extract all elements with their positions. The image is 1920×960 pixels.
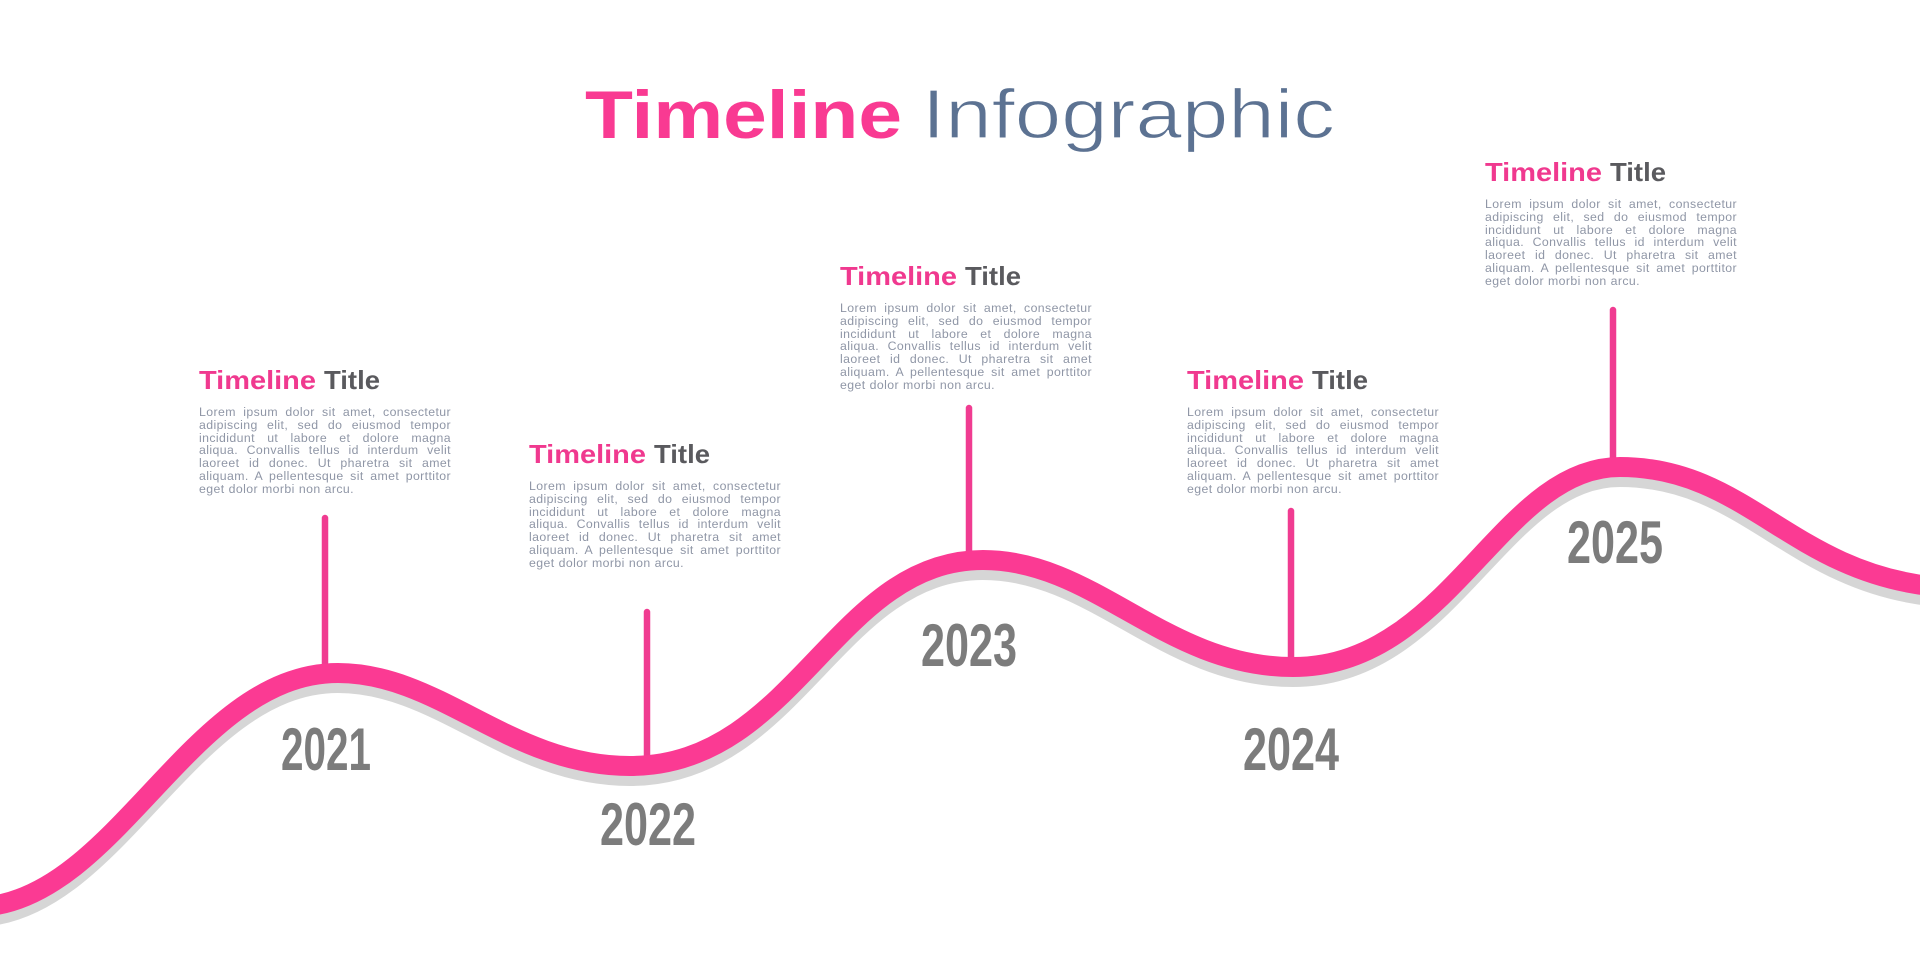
- panel: 2023: [840, 261, 1092, 392]
- panel text: incididunt ut labore et dolore magna: [840, 327, 1092, 341]
- panel text: laoreet id donec. Ut pharetra sit amet: [1485, 248, 1737, 262]
- panel text: [1485, 197, 1737, 288]
- panel text: eget dolor morbi non arcu.: [840, 378, 995, 392]
- panel heading: Timeline: [840, 261, 957, 291]
- panel heading: Timeline: [1485, 157, 1602, 187]
- panel text: laoreet id donec. Ut pharetra sit amet: [529, 530, 781, 544]
- panel text: aliquam. A pellentesque sit amet porttitor: [840, 365, 1092, 379]
- panel heading: Title: [1312, 365, 1368, 395]
- panel heading: Title: [324, 365, 380, 395]
- year 2022: 2022: [600, 791, 696, 858]
- title: [585, 75, 1335, 153]
- title: Infographic: [922, 75, 1335, 153]
- panel text: aliquam. A pellentesque sit amet porttitor: [199, 469, 451, 483]
- panel text: [529, 479, 781, 570]
- panel text: eget dolor morbi non arcu.: [1485, 274, 1640, 288]
- year 2024: 2024: [1243, 716, 1339, 783]
- panel: 2022: [529, 439, 781, 570]
- panel heading: Timeline: [529, 439, 646, 469]
- panel text: Lorem ipsum dolor sit amet, consectetur: [840, 301, 1092, 315]
- panel text: eget dolor morbi non arcu.: [1187, 482, 1342, 496]
- panel text: aliqua. Convallis tellus id interdum velit: [529, 517, 781, 531]
- stem 2025: [1610, 310, 1616, 462]
- panel text: Lorem ipsum dolor sit amet, consectetur: [199, 405, 451, 419]
- panel text: adipiscing elit, sed do eiusmod tempor: [199, 418, 451, 432]
- panel heading: [1485, 157, 1666, 187]
- panel text: Lorem ipsum dolor sit amet, consectetur: [529, 479, 781, 493]
- panel: 2021: [199, 365, 451, 496]
- panel text: laoreet id donec. Ut pharetra sit amet: [199, 456, 451, 470]
- panel text: incididunt ut labore et dolore magna: [1485, 223, 1737, 237]
- panel text: eget dolor morbi non arcu.: [529, 556, 684, 570]
- panel text: laoreet id donec. Ut pharetra sit amet: [840, 352, 1092, 366]
- curve line: [0, 467, 1920, 906]
- panel heading: [840, 261, 1021, 291]
- panel heading: [199, 365, 380, 395]
- panel text: [1187, 405, 1439, 496]
- panel heading: Title: [965, 261, 1021, 291]
- panel text: Lorem ipsum dolor sit amet, consectetur: [1187, 405, 1439, 419]
- panel text: aliquam. A pellentesque sit amet porttitor: [1485, 261, 1737, 275]
- panel text: adipiscing elit, sed do eiusmod tempor: [1187, 418, 1439, 432]
- panel text: incididunt ut labore et dolore magna: [199, 431, 451, 445]
- panel text: aliquam. A pellentesque sit amet porttitor: [1187, 469, 1439, 483]
- title: Timeline: [585, 77, 902, 153]
- panel: 2024: [1187, 365, 1439, 496]
- panel text: adipiscing elit, sed do eiusmod tempor: [529, 492, 781, 506]
- panel text: aliquam. A pellentesque sit amet porttitor: [529, 543, 781, 557]
- panel text: aliqua. Convallis tellus id interdum velit: [840, 339, 1092, 353]
- panel text: adipiscing elit, sed do eiusmod tempor: [1485, 210, 1737, 224]
- panel text: [199, 405, 451, 496]
- panel text: aliqua. Convallis tellus id interdum velit: [199, 443, 451, 457]
- panel heading: [529, 439, 710, 469]
- panel heading: [1187, 365, 1368, 395]
- panel heading: Timeline: [199, 365, 316, 395]
- year 2021: 2021: [281, 716, 371, 783]
- panel: 2025: [1485, 157, 1737, 288]
- stem 2022: [644, 612, 650, 762]
- panel text: aliqua. Convallis tellus id interdum velit: [1187, 443, 1439, 457]
- panel text: aliqua. Convallis tellus id interdum velit: [1485, 235, 1737, 249]
- panel text: Lorem ipsum dolor sit amet, consectetur: [1485, 197, 1737, 211]
- stem 2023: [966, 408, 972, 556]
- panel text: incididunt ut labore et dolore magna: [1187, 431, 1439, 445]
- panel text: laoreet id donec. Ut pharetra sit amet: [1187, 456, 1439, 470]
- stem 2024: [1288, 511, 1294, 662]
- panel heading: Title: [654, 439, 710, 469]
- curve shadow: [0, 477, 1920, 916]
- stem 2021: [322, 518, 328, 670]
- year 2025: 2025: [1567, 509, 1663, 576]
- panel heading: Title: [1610, 157, 1666, 187]
- panel text: incididunt ut labore et dolore magna: [529, 505, 781, 519]
- year 2023: 2023: [921, 612, 1017, 679]
- panel heading: Timeline: [1187, 365, 1304, 395]
- panel text: [840, 301, 1092, 392]
- panel text: eget dolor morbi non arcu.: [199, 482, 354, 496]
- panel text: adipiscing elit, sed do eiusmod tempor: [840, 314, 1092, 328]
